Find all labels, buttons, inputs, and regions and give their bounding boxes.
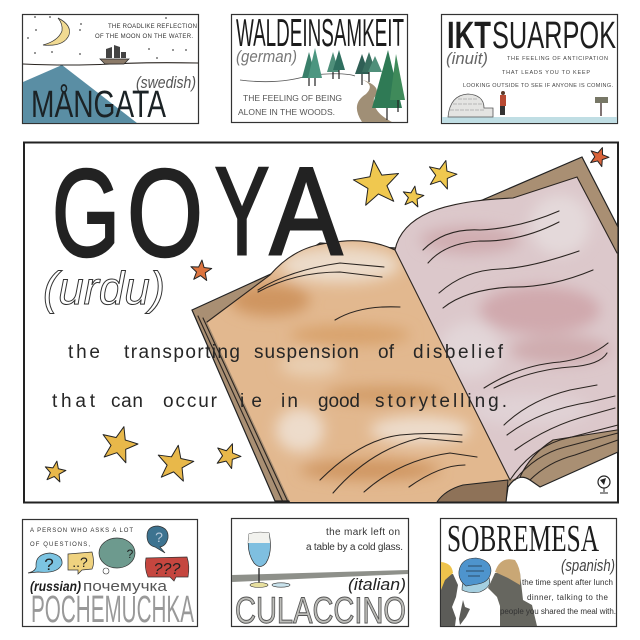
language and cyrillic word: почемучка — [83, 578, 168, 595]
language: (italian) — [348, 575, 406, 594]
definition line 2: storytelling. — [375, 391, 507, 412]
speech bubbles — [459, 558, 491, 593]
icon: ship — [100, 45, 129, 64]
language: (german) — [236, 47, 297, 66]
left person — [441, 562, 470, 626]
book — [190, 157, 620, 505]
language and cyrillic word — [30, 578, 168, 595]
path — [240, 74, 355, 82]
ground — [442, 117, 617, 123]
icon: trees — [302, 48, 405, 120]
definition line 2: can — [111, 391, 143, 412]
description — [95, 24, 197, 40]
definition line 1: of — [378, 342, 395, 363]
definition line 1: the — [68, 342, 100, 363]
description: A PERSON WHO ASKS A LOT — [30, 528, 133, 534]
panel: waldeinsamkeit — [232, 12, 408, 122]
description — [500, 578, 616, 616]
icon: globe signature — [598, 476, 610, 493]
heading: MÅNGATA — [31, 82, 166, 126]
definition line 1: disbelief — [413, 342, 504, 363]
definition line 1: transporting — [124, 342, 240, 363]
panel: goya main — [24, 142, 620, 505]
description: OF QUESTIONS, — [30, 542, 90, 548]
description — [238, 93, 342, 117]
icon: stars — [43, 144, 611, 483]
description — [463, 56, 613, 89]
page outlines — [198, 177, 617, 502]
right page — [390, 170, 620, 490]
book cover — [192, 157, 618, 501]
definition line 1 — [68, 342, 504, 363]
heading: GOYA — [52, 143, 342, 283]
book text lines — [258, 211, 615, 493]
description — [306, 527, 403, 553]
icon: person — [500, 91, 506, 115]
heading: IKT — [447, 15, 491, 57]
language and cyrillic word: (russian) — [30, 578, 81, 594]
icon: speech bubbles — [28, 526, 189, 581]
page edges bottom — [437, 480, 508, 502]
description: people you shared the meal with. — [500, 607, 616, 616]
definition line 2: in — [281, 391, 298, 412]
icon: mailbox — [595, 97, 608, 116]
panel: iktsuarpok — [442, 14, 618, 124]
definition line 2: occur — [163, 391, 218, 412]
language: urdu: (urdu) — [43, 262, 165, 314]
language: (inuit) — [446, 49, 488, 68]
language: (spanish) — [561, 556, 615, 575]
definition line 1: suspension — [254, 342, 359, 363]
panel: sobremesa — [440, 518, 616, 626]
panel: culaccino — [232, 518, 408, 631]
icon: speech bubbles: ??? — [154, 561, 180, 578]
description: the mark left on — [326, 527, 400, 538]
heading: POCHEMUCHKA — [31, 589, 194, 631]
description: THE FEELING OF BEING — [243, 93, 342, 103]
description: THE FEELING OF ANTICIPATION — [507, 56, 608, 62]
icon: igloo — [448, 94, 493, 117]
table — [232, 570, 408, 582]
heading — [447, 15, 616, 57]
description: THE ROADLIKE REFLECTION — [108, 24, 197, 30]
icon: mountain — [23, 65, 137, 123]
description: ALONE IN THE WOODS. — [238, 107, 335, 117]
icon: crescent moon — [43, 18, 70, 45]
icon: glass — [248, 532, 290, 588]
right person — [488, 559, 537, 626]
heading: GOYA: G — [52, 145, 120, 283]
heading: GOYA: Y — [215, 143, 269, 281]
horizon line — [23, 63, 198, 65]
panel: pochemuchka — [22, 520, 198, 631]
description — [30, 528, 133, 548]
definition line 2: ie — [240, 391, 262, 412]
description: a table by a cold glass. — [306, 542, 403, 553]
definition line 2 — [52, 391, 507, 412]
panel: mangata — [22, 14, 198, 126]
heading: GOYA: A — [270, 143, 342, 281]
left page — [207, 241, 510, 502]
description: OF THE MOON ON THE WATER. — [95, 34, 193, 40]
heading: GOYA: O — [127, 145, 203, 283]
icon: speech bubbles: ? — [155, 529, 163, 545]
language: (swedish) — [136, 73, 196, 92]
heading: CULACCINO — [235, 590, 406, 631]
icon: speech bubbles: ? — [44, 555, 54, 574]
description: the time spent after lunch — [522, 578, 613, 587]
icon: speech bubbles: ? — [127, 547, 134, 561]
description: LOOKING OUTSIDE TO SEE IF ANYONE IS COMING. — [463, 83, 613, 89]
icon: speech bubbles: ..? — [72, 554, 88, 570]
definition line 2: that — [52, 391, 96, 412]
description: dinner, talking to the — [527, 593, 609, 602]
description: THAT LEADS YOU TO KEEP — [502, 70, 590, 76]
definition line 2: good — [318, 391, 360, 412]
icon: stars — [27, 16, 187, 59]
text: WALDEINSAMKEIT — [236, 12, 404, 55]
